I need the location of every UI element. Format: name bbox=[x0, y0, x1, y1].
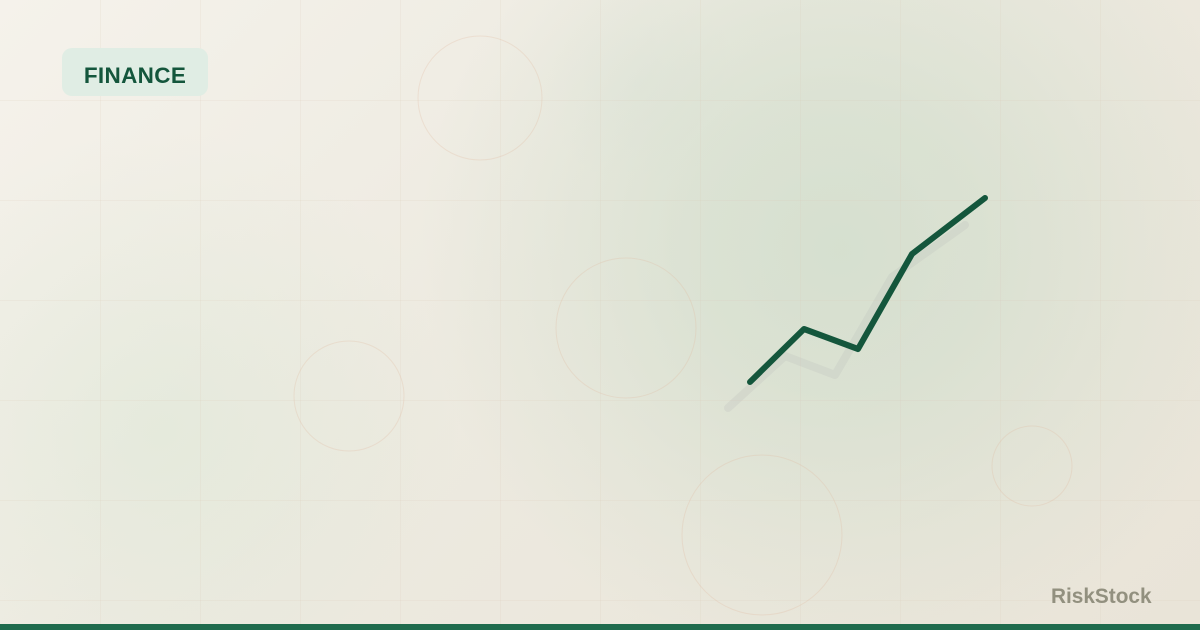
bottom bar bbox=[0, 624, 1200, 630]
line chart bbox=[728, 198, 985, 408]
brand wordmark: RiskStock bbox=[1051, 585, 1152, 608]
chart shadow line bbox=[728, 225, 965, 408]
decorative circles bbox=[294, 36, 1072, 615]
category badge bbox=[62, 48, 208, 96]
chart main line bbox=[750, 198, 985, 382]
category badge: FINANCE bbox=[84, 63, 186, 88]
